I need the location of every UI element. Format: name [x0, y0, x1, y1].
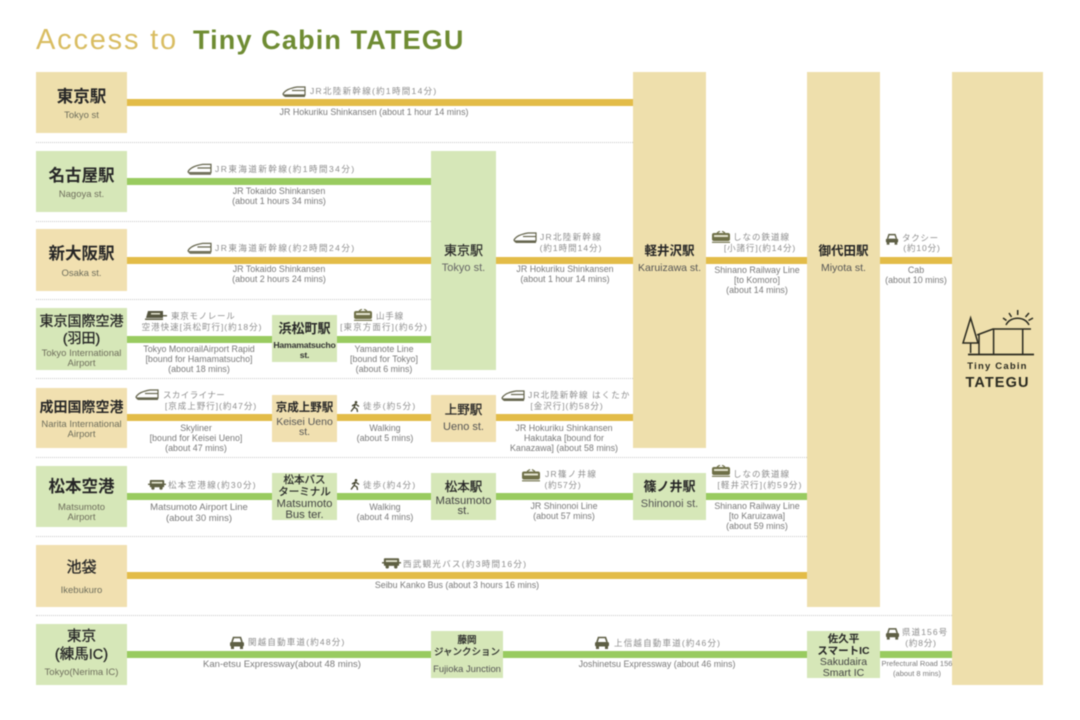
japanese label: JR北陸新幹線(約1時間14分) — [310, 86, 438, 96]
station: Nerima IC: (練馬IC) — [55, 647, 108, 663]
station: Haneda: Tokyo International — [42, 348, 121, 359]
english label: (about 18 mins) — [168, 364, 230, 374]
icon: car — [885, 233, 899, 246]
station: Tokyo: Tokyo st — [64, 110, 99, 121]
english label — [714, 502, 800, 531]
station: Nagoya: 名古屋駅 — [48, 167, 114, 185]
english label: (about 59 mins) — [726, 521, 788, 531]
english label: [to Karuizawa] — [729, 511, 785, 521]
route: Matsumoto to Shinonoi — [495, 468, 634, 522]
japanese time: [京成上野行](約47分) — [165, 401, 257, 411]
english label: Tokyo MonorailAirport Rapid — [143, 344, 255, 354]
station: Hamamatsucho: 浜松町駅 — [278, 321, 330, 336]
english label: Walking — [369, 502, 401, 512]
english label: Kan-etsu Expressway(about 48 mins) — [203, 659, 361, 670]
english label — [150, 502, 248, 524]
column: Karuizawa station: Karuizawa st. — [638, 262, 701, 274]
icon: shinkansen — [500, 390, 526, 402]
english label — [510, 423, 618, 454]
station: Matsumoto Bus Terminal — [272, 473, 337, 520]
line — [880, 651, 952, 658]
english label: Hakutaka [bound for — [524, 433, 604, 443]
route: Tokyo to Karuizawa, Hokuriku Shinkansen — [126, 86, 634, 118]
line — [127, 651, 431, 658]
column: Tokyo station: 東京駅 — [444, 243, 483, 258]
english label: JR Hokuriku Shinkansen — [516, 264, 614, 274]
column: Karuizawa station: 軽井沢駅 — [644, 244, 694, 258]
english label: Seibu Kanko Bus (about 3 hours 16 mins) — [375, 580, 539, 590]
japanese label: 徒歩(約4分) — [363, 480, 416, 490]
station: Hamamatsucho: st. — [300, 350, 309, 360]
english label: [to Komoro] — [734, 275, 780, 285]
english label: Skyliner — [180, 423, 212, 433]
japanese time: [金沢行](約58分) — [530, 401, 604, 411]
english label: (about 2 hours 24 mins) — [232, 274, 326, 284]
route: Karuizawa to Miyota — [705, 230, 808, 296]
english label: (about 8 mins) — [893, 669, 941, 678]
station: Matsumoto: Matsumoto — [436, 495, 491, 507]
japanese label: 徒歩(約5分) — [363, 401, 416, 411]
line — [127, 572, 807, 579]
column: Tokyo station: Tokyo st. — [442, 262, 485, 274]
station: Narita: Narita International — [41, 419, 122, 430]
japanese label: しなの鉄道線 — [733, 469, 790, 479]
route: Sakudaira to cabin by road — [880, 627, 952, 679]
line — [496, 414, 633, 421]
english label — [143, 344, 255, 374]
station: Haneda — [36, 308, 127, 370]
japanese label: スカイライナー — [163, 390, 225, 400]
line — [127, 493, 272, 500]
station: Shinonoi — [633, 473, 706, 520]
english label: (about 5 mins) — [357, 433, 413, 443]
station: Matsumoto: 松本駅 — [445, 480, 482, 494]
japanese label: 松本空港線(約30分) — [168, 480, 257, 490]
station: Nerima IC: Tokyo(Nerima IC) — [45, 667, 118, 678]
english label — [232, 186, 326, 206]
japanese time: [小諸行](約14分) — [724, 243, 796, 253]
english label: Matsumoto Airport Line — [150, 502, 248, 513]
japanese time: [軽井沢行](約59分) — [717, 480, 803, 490]
english label — [882, 659, 952, 679]
route: Miyota to cabin by cab — [879, 233, 953, 286]
route: walk bus terminal to Matsumoto — [336, 478, 432, 522]
station: Ueno: Ueno st. — [443, 421, 484, 433]
japanese label: JR篠ノ井線 — [545, 469, 597, 479]
station: Hamamatsucho: Hamamatsucho — [273, 340, 336, 350]
logo text — [952, 361, 1043, 392]
interchange: Sakudaira: Sakudaira — [820, 656, 867, 668]
station: Narita — [36, 388, 127, 448]
japanese label: JR北陸新幹線 — [540, 232, 602, 242]
english label — [885, 265, 947, 286]
station: Matsumoto Airport: 松本空港 — [48, 478, 114, 496]
icon: shinkansen — [512, 232, 538, 244]
station: Osaka — [36, 229, 127, 291]
station: Matsumoto Airport: Matsumoto — [58, 502, 105, 513]
station: Ikebukuro: 池袋 — [66, 559, 96, 576]
english label: Shinano Railway Line — [714, 265, 800, 275]
station: Shinonoi: 篠ノ井駅 — [643, 479, 696, 494]
english label: JR Hokuriku Shinkansen — [515, 423, 613, 433]
line — [496, 257, 633, 264]
station: Keisei Ueno: Keisei Ueno — [276, 416, 333, 428]
line — [337, 414, 431, 421]
english label: Prefectural Road 156 — [882, 659, 952, 668]
station: Narita: Airport — [68, 429, 95, 440]
station: Nerima IC: 東京 — [67, 629, 96, 645]
station: Ueno — [431, 395, 496, 442]
interchange: Sakudaira — [807, 631, 880, 678]
logo text: Tiny Cabin — [967, 361, 1028, 372]
junction: Fujioka — [431, 631, 503, 678]
column: Tiny Cabin TATEGU destination — [952, 72, 1043, 685]
station: Ikebukuro: Ikebukuro — [61, 585, 102, 596]
station: Haneda: (羽田) — [63, 330, 100, 346]
line — [127, 99, 633, 106]
route: Nagoya to Tokyo — [126, 163, 432, 206]
icon: monorail — [144, 310, 168, 321]
line — [706, 493, 807, 500]
english label — [714, 265, 800, 296]
route: Shinonoi to Karuizawa — [706, 465, 807, 533]
english label: Walking — [369, 423, 401, 433]
english label: (about 10 mins) — [885, 275, 947, 285]
route: Nerima to Fujioka — [127, 636, 431, 670]
station: Osaka: 新大阪駅 — [48, 245, 114, 263]
route: Fujioka to Sakudaira — [503, 636, 807, 670]
logo text: TATEGU — [965, 375, 1030, 391]
icon: walking — [350, 400, 360, 413]
junction: Fujioka: Fujioka Junction — [433, 663, 501, 674]
english label: [bound for Hamamatsucho] — [145, 354, 253, 364]
station: Osaka: Osaka st. — [61, 268, 102, 279]
station: Matsumoto: st. — [458, 505, 469, 517]
route: Tokyo to Karuizawa mid section — [495, 232, 634, 284]
column: Karuizawa station — [633, 72, 706, 448]
english label: (about 1 hours 34 mins) — [232, 196, 326, 206]
icon: shinkansen — [134, 388, 160, 401]
japanese time: (約8分) — [905, 638, 937, 648]
route: Hamamatsucho to Tokyo — [336, 308, 432, 374]
line — [880, 257, 952, 264]
english label: Kanazawa] (about 58 mins) — [510, 443, 618, 453]
japanese time: [東京方面行](約6分) — [340, 322, 428, 332]
english label — [356, 502, 414, 522]
japanese time: (約1時間14分) — [540, 243, 602, 253]
japanese label: JR東海道新幹線(約2時間24分) — [215, 243, 356, 253]
english label: (about 30 mins) — [166, 513, 232, 524]
japanese label: しなの鉄道線 — [733, 232, 790, 242]
station: Nagoya: Nagoya st. — [59, 189, 104, 200]
english label — [356, 423, 414, 444]
japanese label: 県道156号 — [902, 627, 948, 637]
english label: Yamanote Line — [354, 344, 414, 354]
station: Keisei Ueno: 京成上野駅 — [276, 402, 333, 414]
route: walk Keisei Ueno to Ueno — [336, 400, 432, 444]
column: Miyota station: Miyota st. — [821, 262, 866, 274]
icon: bus — [147, 479, 167, 490]
icon: shinkansen — [282, 86, 306, 98]
interchange: Sakudaira: 佐久平 — [828, 633, 859, 645]
icon: bus — [382, 558, 401, 569]
line — [127, 414, 272, 421]
line — [503, 651, 807, 658]
station: Tokyo: 東京駅 — [57, 88, 106, 106]
line — [706, 257, 807, 264]
station: Shinonoi: Shinonoi st. — [641, 498, 698, 510]
interchange: Sakudaira: スマートIC — [817, 645, 870, 657]
icon: train — [521, 469, 541, 482]
station: Haneda: Airport — [68, 358, 95, 369]
station: Haneda: 東京国際空港 — [40, 313, 124, 329]
station: Nerima IC — [36, 624, 127, 685]
japanese label: タクシー — [902, 233, 939, 243]
japanese label: JR東海道新幹線(約1時間34分) — [215, 164, 356, 174]
english label: JR Tokaido Shinkansen — [233, 186, 325, 196]
route: Haneda to Hamamatsucho — [126, 310, 273, 374]
station: Matsumoto Bus Terminal: Bus ter. — [285, 508, 324, 520]
english label — [150, 423, 242, 454]
japanese label: 関越自動車道(約48分) — [248, 637, 346, 647]
english label: [bound for Tokyo] — [350, 354, 418, 364]
icon: train — [711, 230, 731, 244]
line — [496, 493, 633, 500]
line — [127, 257, 431, 264]
title: tiny cabin tategu: Tiny Cabin TATEGU — [193, 25, 465, 55]
title: access to: Access to — [36, 24, 178, 56]
route: Ikebukuro to Miyota by bus — [127, 558, 807, 592]
english label: (about 4 mins) — [357, 512, 413, 522]
english label: (about 6 mins) — [356, 364, 412, 374]
icon: train — [353, 308, 373, 322]
route: Narita to Keisei Ueno — [126, 388, 273, 454]
english label: JR Shinonoi Line — [530, 501, 598, 511]
japanese time: (約57分) — [545, 480, 581, 490]
column: Miyota station: 御代田駅 — [818, 244, 868, 258]
english label: (about 1 hour 14 mins) — [520, 274, 610, 284]
column: Miyota station — [807, 72, 880, 607]
english label: (about 47 mins) — [165, 443, 227, 453]
route: Ueno to Karuizawa — [495, 390, 634, 454]
line — [127, 336, 272, 343]
english label: Shinano Railway Line — [714, 501, 800, 511]
japanese label: 西武観光バス(約3時間16分) — [403, 559, 527, 569]
junction: Fujioka: 藤岡 — [457, 635, 476, 646]
japanese label: 山手線 — [376, 311, 404, 321]
line — [337, 493, 431, 500]
station: Matsumoto Bus Terminal: ターミナル — [278, 486, 331, 498]
line — [337, 336, 431, 343]
line — [127, 178, 431, 185]
station: Nagoya — [36, 151, 127, 212]
title — [36, 24, 465, 56]
icon: car — [229, 636, 245, 649]
station: Matsumoto — [431, 473, 496, 520]
station: Tokyo — [36, 72, 127, 133]
japanese label: 上信越自動車道(約46分) — [614, 638, 721, 648]
english label: (about 57 mins) — [533, 511, 595, 521]
station: Keisei Ueno: st. — [299, 426, 310, 438]
station: Matsumoto Airport — [36, 466, 127, 527]
english label — [232, 264, 326, 284]
japanese label: JR北陸新幹線 はくたか — [528, 390, 630, 400]
english label: Joshinetsu Expressway (about 46 mins) — [579, 659, 735, 669]
japanese label: 東京モノレール — [171, 311, 235, 321]
icon: car — [885, 627, 900, 640]
station: Matsumoto Bus Terminal: Matsumoto — [277, 498, 332, 510]
route: Matsumoto Airport to bus terminal — [126, 479, 273, 524]
station: Hamamatsucho — [272, 315, 337, 362]
english label: JR Hokuriku Shinkansen (about 1 hour 14 mins) — [280, 107, 468, 117]
icon: shinkansen — [186, 242, 212, 254]
station: Ueno: 上野駅 — [445, 403, 482, 417]
station: Keisei Ueno — [272, 395, 337, 442]
english label: Cab — [908, 265, 924, 275]
english label: [bound for Keisei Ueno] — [150, 433, 242, 443]
icon: walking — [350, 478, 360, 491]
icon: car — [594, 636, 610, 649]
station: Narita: 成田国際空港 — [40, 399, 124, 415]
icon: cabin logo — [962, 310, 1036, 356]
station: Matsumoto Airport: Airport — [68, 512, 95, 523]
station: Matsumoto Bus Terminal: 松本バス — [284, 474, 326, 486]
japanese time: 空港快速[浜松町行](約18分) — [142, 322, 262, 332]
english label — [530, 502, 598, 522]
icon: train — [711, 465, 731, 477]
route: Osaka to Tokyo — [126, 242, 432, 284]
station: Ikebukuro — [36, 545, 127, 607]
english label — [350, 344, 418, 374]
japanese time: (約10分) — [903, 243, 941, 253]
icon: shinkansen — [186, 163, 212, 176]
english label: (about 14 mins) — [726, 285, 788, 295]
english label: JR Tokaido Shinkansen — [233, 264, 325, 274]
english label — [516, 264, 614, 284]
junction: Fujioka: ジャンクション — [434, 647, 500, 658]
interchange: Sakudaira: Smart IC — [823, 667, 864, 679]
column: Tokyo station — [431, 151, 496, 370]
